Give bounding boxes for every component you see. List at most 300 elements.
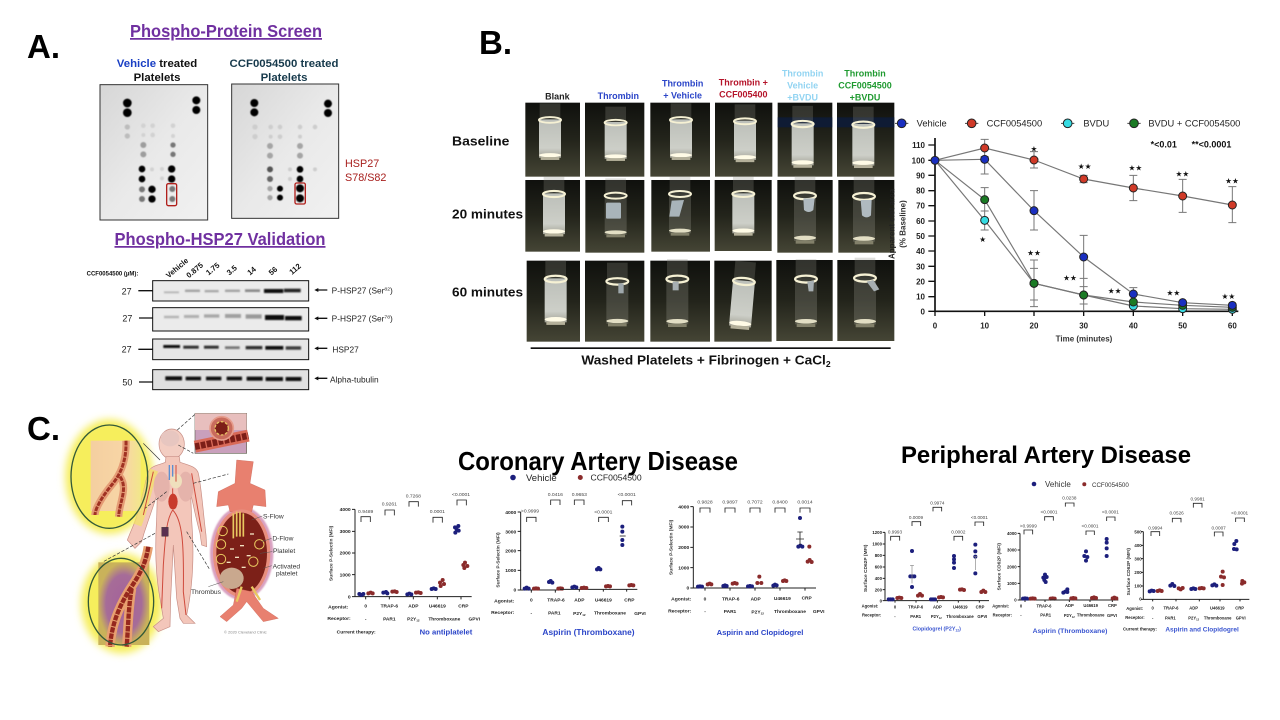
- chart: CAD no antiplatelet: PAR1: [383, 617, 396, 623]
- chart: PAD aspirin and clopidogrel: 0: [1152, 606, 1155, 611]
- significance key: *<0.01: [1151, 140, 1177, 150]
- chart: CAD aspirin and clopidogrel: CRP: [802, 595, 813, 601]
- legend: peripheral: CCF0054500: [1092, 482, 1129, 489]
- label: CCF0054500 treated platelets: CCF0054500 treated: [230, 58, 338, 70]
- legend: coronary: Vehicle: [526, 473, 557, 484]
- chart: PAD clopidogrel: Clopidogrel (P2Y: [912, 627, 955, 633]
- column headers: Vehicle: [787, 80, 818, 90]
- chart: CAD aspirin and clopidogrel: 1000: [678, 565, 690, 571]
- chart: PAD clopidogrel: CRP: [976, 604, 985, 609]
- chart: CAD aspirin: 3000: [505, 529, 517, 535]
- chart: CAD aspirin: Receptor:: [491, 610, 515, 616]
- chart: CAD aspirin: U46619: [595, 598, 612, 604]
- chart: PAD clopidogrel: 0.0002: [951, 529, 966, 534]
- aneurysm labels: Thrombus: [191, 589, 222, 596]
- blot row: alpha-tubulin: [153, 370, 309, 390]
- illustration credit: © 2020 Cleveland Clinic: [224, 630, 267, 635]
- molecular weight markers: [122, 286, 132, 388]
- aneurysm labels: D-Flow: [272, 535, 294, 542]
- chart: CAD no antiplatelet: Thromboxane: [428, 616, 461, 622]
- heading: Phospho-Protein Screen: Phospho-Protein Screen: [130, 21, 322, 41]
- column headers: + Vehicle: [663, 91, 702, 101]
- dose label: CCF0054500 (µM):: [87, 271, 138, 277]
- column headers: CCF005400: [719, 90, 768, 100]
- axes and tick labels: 40: [1129, 322, 1138, 331]
- axes and tick labels: 100: [912, 156, 926, 165]
- legend: peripheral: [1032, 480, 1129, 489]
- lane labels: 1.75: [204, 260, 222, 277]
- chart: PAD clopidogrel: 0: [880, 598, 883, 603]
- chart: CAD aspirin: >0.9999: [521, 509, 539, 515]
- blot row: HSP27: [153, 339, 309, 360]
- chart: CAD aspirin: 12: [582, 613, 586, 617]
- chart: PAD clopidogrel: 1200: [872, 530, 883, 535]
- chart: PAD aspirin and clopidogrel: Aspirin and Clopidogrel: [1165, 627, 1239, 634]
- bracket line and caption: 2: [826, 360, 831, 369]
- axes and tick labels: [888, 138, 1238, 344]
- chart: PAD clopidogrel: 0.0009: [909, 515, 924, 520]
- chart: PAD aspirin and clopidogrel: 0.0526: [1170, 511, 1184, 516]
- legend: peripheral: Vehicle: [1045, 480, 1071, 489]
- chart: CAD aspirin and clopidogrel: 0.9828: [697, 499, 713, 505]
- chart: PAD aspirin: <0.0001: [1082, 523, 1099, 528]
- column headers: +BVDU: [787, 92, 818, 102]
- chart: CAD aspirin and clopidogrel: Surface P-Selectin (MFI): [668, 519, 674, 575]
- chart: PAD aspirin: 1000: [1007, 581, 1017, 586]
- chart: CAD no antiplatelet: 0: [364, 604, 367, 610]
- column headers: Thrombin +: [719, 78, 768, 88]
- body silhouette: [127, 429, 207, 632]
- chart B: apparent clot area over time: [888, 119, 1240, 344]
- axes and tick labels: 60: [916, 217, 926, 226]
- chart: CAD aspirin and clopidogrel: 0.7072: [747, 499, 763, 505]
- chart: CAD aspirin and clopidogrel: GPVI: [813, 609, 825, 615]
- column headers: Thrombin: [662, 79, 703, 89]
- series: BVDU: [935, 160, 1236, 313]
- significance stars: ★★: [1063, 273, 1077, 282]
- chart: PAD clopidogrel: ADP: [933, 604, 942, 609]
- photo row: 20 minutes: [525, 176, 894, 253]
- chart: CAD aspirin and clopidogrel: 4000: [678, 504, 690, 510]
- chart: PAD clopidogrel: -: [894, 614, 896, 619]
- chart: CAD no antiplatelet: No antiplatelet: [420, 628, 473, 637]
- chart: PAD clopidogrel: GPVI: [977, 614, 987, 619]
- chart: PAD clopidogrel: 600: [875, 565, 883, 570]
- chart: PAD clopidogrel: Thromboxane: [946, 614, 974, 619]
- chart: CAD no antiplatelet: [327, 492, 481, 637]
- chart: PAD aspirin: 0: [1020, 603, 1023, 608]
- panel C: vascular anatomy illustration: [65, 413, 300, 653]
- chart: CAD aspirin and clopidogrel: 12: [761, 611, 764, 615]
- chart: CAD aspirin: TRAP-6: [547, 598, 565, 604]
- chart: CAD aspirin: 0.9653: [572, 492, 587, 498]
- axes and tick labels: 30: [916, 262, 926, 271]
- chart: PAD aspirin and clopidogrel: CRP: [1235, 606, 1244, 611]
- chart: PAD aspirin and clopidogrel: -: [1152, 615, 1154, 620]
- chart: CAD aspirin: <0.0001: [594, 509, 613, 515]
- inset: aortic aneurysm: [210, 460, 278, 622]
- chart: PAD clopidogrel: Surface CD62P (MFI): [863, 544, 869, 592]
- chart: CAD no antiplatelet: 0.9489: [358, 509, 374, 515]
- chart: PAD aspirin and clopidogrel: Receptor:: [1125, 615, 1145, 620]
- band labels: P-HSP27 (Ser: [332, 285, 384, 295]
- lane labels: 0.875: [184, 260, 206, 280]
- band labels: 78: [384, 315, 390, 321]
- lane labels: 14: [245, 264, 258, 277]
- band labels: ): [390, 285, 393, 295]
- chart: PAD aspirin: [992, 495, 1119, 635]
- series: BVDU + CCF0054500: [935, 160, 1236, 311]
- chart: CAD no antiplatelet: GPVI: [469, 617, 481, 623]
- chart: CAD aspirin: 0: [530, 598, 533, 604]
- significance stars: ★: [979, 235, 986, 244]
- lane labels: 112: [287, 262, 303, 277]
- series: Vehicle: [935, 155, 1236, 309]
- chart: CAD no antiplatelet: 0.9261: [382, 502, 397, 508]
- error bars: [981, 139, 1236, 311]
- chart: PAD aspirin: GPVI: [1107, 613, 1117, 618]
- chart: CAD aspirin and clopidogrel: ADP: [751, 597, 762, 603]
- chart: PAD aspirin: -: [1020, 613, 1022, 618]
- chart: PAD clopidogrel: [862, 500, 989, 633]
- column headers: Thrombin: [844, 68, 886, 78]
- axes and tick labels: 10: [916, 293, 926, 302]
- chart: CAD aspirin and clopidogrel: 0.9897: [722, 499, 738, 505]
- chart: CAD no antiplatelet: U46619: [429, 604, 446, 610]
- chart: CAD aspirin: GPVI: [634, 611, 646, 617]
- legend: Vehicle: [917, 119, 947, 129]
- bracket line and caption: Washed Platelets + Fibrinogen + CaCl: [581, 353, 808, 367]
- axes and tick labels: 0: [933, 322, 938, 331]
- chart: CAD aspirin and clopidogrel: -: [704, 610, 706, 615]
- chart: PAD aspirin and clopidogrel: 0.0007: [1212, 525, 1226, 530]
- chart: PAD aspirin: PAR1: [1040, 613, 1052, 618]
- aneurysm labels: S-Flow: [263, 514, 284, 521]
- photo row: 60 minutes: [527, 258, 894, 342]
- legend: [895, 119, 1240, 129]
- label lines: [208, 516, 272, 587]
- chart: CAD aspirin and clopidogrel: U46619: [774, 596, 791, 602]
- chart: CAD no antiplatelet: Agonist:: [328, 604, 349, 610]
- chart: PAD aspirin: Surface CD62P (MFI): [997, 543, 1003, 590]
- legend: BVDU + CCF0054500: [1148, 119, 1240, 129]
- axes and tick labels: 10: [980, 322, 990, 331]
- label: vehicle treated platelets: Vehicle treated: [117, 58, 197, 70]
- chart: PAD clopidogrel: 0.9993: [888, 529, 903, 534]
- chart: CAD aspirin and clopidogrel: 0: [704, 597, 707, 603]
- ring: lower limb: [88, 558, 154, 645]
- chart: CAD aspirin and clopidogrel: 0.0014: [797, 499, 813, 505]
- chart: CAD no antiplatelet: <0.0001: [452, 492, 470, 498]
- row label: 20 minutes: 20 minutes: [452, 208, 523, 222]
- heading: Coronary Artery Disease: Coronary Artery Disease: [458, 446, 738, 476]
- heading: Phospho-HSP27 Validation: Phospho-HSP27 Validation: [114, 229, 326, 249]
- axes and tick labels: 60: [1228, 322, 1237, 331]
- significance stars: ★★: [1078, 162, 1092, 171]
- row label: Baseline: Baseline: [452, 135, 509, 149]
- callout lines: [103, 414, 228, 570]
- chart: PAD aspirin: 4000: [1007, 531, 1017, 536]
- chart: PAD aspirin and clopidogrel: 0.9994: [1148, 525, 1163, 530]
- chart: PAD clopidogrel: 12: [955, 629, 959, 633]
- chart: PAD clopidogrel: 12: [939, 616, 942, 620]
- significance stars: [979, 145, 1239, 301]
- chart: CAD aspirin and clopidogrel: PAR1: [724, 609, 737, 615]
- label: HSP27 S78/S82: S78/S82: [345, 172, 386, 184]
- chart: PAD aspirin and clopidogrel: 400: [1134, 543, 1142, 548]
- axes and tick labels: 80: [916, 187, 926, 196]
- chart: PAD aspirin and clopidogrel: 0.9981: [1191, 496, 1205, 501]
- phospho array membrane: vehicle: [100, 85, 208, 220]
- band labels: 82: [384, 286, 390, 292]
- chart: PAD aspirin and clopidogrel: U46619: [1210, 606, 1225, 611]
- lane labels: 56: [267, 265, 279, 277]
- label: vehicle treated platelets: Platelets: [134, 72, 180, 84]
- inset: upper limb artery: [91, 441, 141, 517]
- chart: PAD aspirin and clopidogrel: 0: [1139, 597, 1142, 602]
- chart: PAD aspirin and clopidogrel: 500: [1134, 529, 1142, 534]
- chart: PAD clopidogrel: 400: [875, 576, 883, 581]
- axes and tick labels: 70: [916, 202, 926, 211]
- chart: CAD no antiplatelet: 0: [348, 594, 351, 600]
- chart: CAD aspirin and clopidogrel: 3000: [678, 525, 690, 531]
- chart: CAD aspirin: 4000: [505, 510, 517, 516]
- chart: PAD aspirin: 3000: [1007, 548, 1017, 553]
- axes and tick labels: 20: [916, 277, 926, 286]
- chart: CAD aspirin: Thromboxane: [594, 611, 626, 617]
- chart: CAD aspirin and clopidogrel: Receptor:: [668, 609, 692, 615]
- chart: PAD aspirin: 0.0238: [1062, 495, 1077, 500]
- chart: CAD aspirin and clopidogrel: 2000: [678, 545, 690, 551]
- chart: CAD no antiplatelet: P2Y: [407, 618, 416, 623]
- significance stars: ★: [1031, 145, 1038, 154]
- axes and tick labels: Time (minutes): [1056, 335, 1113, 344]
- band arrows: [314, 288, 327, 380]
- chart: PAD aspirin and clopidogrel: 200: [1134, 570, 1142, 575]
- axes and tick labels: 50: [1178, 322, 1188, 331]
- aneurysm labels: Platelet: [273, 548, 295, 555]
- panel A: phospho-protein screen and validation: [27, 21, 393, 390]
- chart: PAD aspirin: >0.9999: [1020, 523, 1037, 528]
- chart: PAD clopidogrel: P2Y: [931, 614, 939, 619]
- chart: PAD aspirin: Thromboxane: [1077, 613, 1105, 618]
- significance key 2: **<0.0001: [1192, 140, 1231, 150]
- chart: PAD clopidogrel: ): [959, 627, 961, 633]
- chart: CAD aspirin and clopidogrel: 0.8400: [772, 499, 788, 505]
- aneurysm labels: Activated: [273, 563, 300, 570]
- molecular weight markers: 27: [122, 314, 132, 324]
- chart: PAD aspirin and clopidogrel: Current therapy:: [1123, 627, 1157, 632]
- chart: PAD aspirin: ADP: [1065, 603, 1074, 608]
- chart: PAD clopidogrel: 0: [894, 604, 897, 609]
- ring: upper limb: [71, 425, 148, 528]
- chart: CAD aspirin and clopidogrel: Agonist:: [671, 597, 692, 603]
- chart: CAD no antiplatelet: -: [365, 617, 367, 622]
- chart: CAD aspirin and clopidogrel: TRAP-6: [722, 597, 740, 603]
- panel letter B: B.: [479, 24, 512, 61]
- axes and tick labels: 0: [921, 307, 926, 316]
- chart: PAD aspirin and clopidogrel: ADP: [1189, 606, 1198, 611]
- chart: CAD aspirin: 2000: [505, 549, 517, 555]
- lane labels: [164, 256, 303, 280]
- chart: PAD aspirin: 2000: [1007, 564, 1017, 569]
- chart: PAD aspirin and clopidogrel: <0.0001: [1231, 511, 1249, 516]
- chart: PAD clopidogrel: Receptor:: [862, 613, 881, 618]
- chart: CAD no antiplatelet: 0.0001: [430, 509, 445, 515]
- column headers: Blank: [545, 92, 570, 102]
- chart: PAD clopidogrel: PAR1: [910, 614, 922, 619]
- chart: PAD aspirin and clopidogrel: Surface CD62P (MFI): [1126, 548, 1132, 595]
- row label: 60 minutes: 60 minutes: [452, 286, 523, 300]
- molecular weight markers: 27: [122, 286, 132, 296]
- chart: PAD aspirin and clopidogrel: [1123, 496, 1249, 634]
- chart: PAD aspirin and clopidogrel: 100: [1134, 584, 1142, 589]
- chart: CAD aspirin and clopidogrel: 0: [687, 586, 690, 592]
- chart: PAD clopidogrel: 1000: [872, 542, 883, 547]
- chart: CAD no antiplatelet: TRAP-6: [381, 604, 398, 610]
- chart: PAD aspirin: CRP: [1108, 603, 1117, 608]
- chart: PAD aspirin and clopidogrel: 300: [1134, 556, 1142, 561]
- band labels: P-HSP27 (Ser: [332, 314, 384, 324]
- axes and tick labels: 30: [1079, 322, 1089, 331]
- chart: CAD no antiplatelet: Surface P-Selectin (MFI): [329, 525, 335, 581]
- axes and tick labels: (% Baseline): [898, 200, 907, 248]
- column headers: +BVDU: [850, 92, 880, 102]
- yellow glow lower limb: [81, 553, 162, 653]
- chart: PAD aspirin and clopidogrel: Thromboxane: [1204, 615, 1232, 620]
- chart: PAD clopidogrel: U46619: [953, 604, 968, 609]
- column headers: [545, 68, 892, 102]
- axes and tick labels: Apparent clot area: [888, 188, 897, 259]
- inset: cerebral aneurysm: [195, 413, 248, 453]
- chart: CAD aspirin: 0: [514, 588, 517, 594]
- series: CCF0054500: [931, 144, 1236, 209]
- chart: PAD aspirin and clopidogrel: PAR1: [1165, 615, 1176, 620]
- molecular weight markers: 27: [122, 345, 132, 355]
- significance stars: ★★: [1128, 163, 1142, 172]
- legend: coronary: [510, 472, 642, 484]
- chart: CAD aspirin: Agonist:: [494, 599, 515, 605]
- chart: CAD no antiplatelet: Receptor:: [327, 616, 351, 622]
- chart: PAD aspirin: Agonist:: [992, 604, 1009, 609]
- chart: CAD aspirin: 1000: [505, 568, 517, 574]
- chart: CAD aspirin: Surface P-Selectin (MFI): [495, 532, 501, 588]
- chart: CAD aspirin: <0.0001: [618, 492, 636, 498]
- lane labels: Vehicle: [164, 256, 190, 280]
- chart: PAD aspirin: 12: [1072, 615, 1075, 619]
- significance stars: ★★: [1108, 287, 1122, 296]
- legend: coronary: CCF0054500: [590, 472, 642, 482]
- aneurysm labels: [191, 514, 300, 596]
- chart: CAD no antiplatelet: ADP: [408, 604, 419, 610]
- chart: CAD aspirin: [491, 492, 646, 637]
- inset: lower limb artery: [98, 547, 149, 647]
- significance stars: ★★: [1166, 288, 1180, 297]
- significance stars: ★★: [1225, 177, 1239, 186]
- phospho array membrane: CCF0054500: [232, 84, 339, 218]
- blot row: P-HSP27 Ser78: [153, 308, 309, 331]
- chart: PAD clopidogrel: TRAP-6: [908, 604, 924, 609]
- chart: PAD aspirin and clopidogrel: GPVI: [1236, 615, 1246, 620]
- chart: PAD aspirin: Aspirin (Thromboxane): [1033, 628, 1107, 635]
- molecular weight markers: 50: [122, 378, 132, 388]
- chart: CAD no antiplatelet: CRP: [458, 604, 469, 610]
- heading: Peripheral Artery Disease: Peripheral Artery Disease: [901, 442, 1191, 469]
- band labels: ): [390, 314, 393, 324]
- chart: CAD aspirin: CRP: [624, 598, 635, 604]
- chart: PAD aspirin and clopidogrel: Agonist:: [1126, 606, 1143, 611]
- chart: PAD aspirin: U46619: [1083, 603, 1099, 608]
- yellow glow upper limb: [65, 419, 153, 534]
- chart: PAD aspirin: 0: [1014, 598, 1017, 603]
- chart: PAD aspirin: <0.0001: [1102, 509, 1119, 514]
- chart: CAD no antiplatelet: 12: [416, 619, 420, 623]
- panel B: clot retraction photos: [452, 68, 894, 369]
- chart: PAD clopidogrel: Agonist:: [862, 604, 878, 609]
- significance stars: ★★: [1175, 169, 1189, 178]
- chart: CAD aspirin: PAR1: [548, 611, 561, 617]
- chart: CAD no antiplatelet: 1000: [340, 572, 351, 578]
- chart: CAD aspirin and clopidogrel: Thromboxane: [774, 609, 806, 615]
- chart: CAD aspirin and clopidogrel: P2Y: [751, 610, 761, 615]
- chart: CAD aspirin: Aspirin (Thromboxane): [542, 627, 635, 637]
- chart: CAD aspirin: P2Y: [573, 612, 582, 617]
- legend: CCF0054500: [987, 119, 1042, 129]
- chart: CAD no antiplatelet: 4000: [340, 507, 351, 513]
- significance stars: ★★: [1221, 292, 1235, 301]
- blot row: P-HSP27 Ser82: [153, 281, 309, 301]
- chart: CAD aspirin and clopidogrel: Aspirin and Clopidogrel: [717, 628, 803, 637]
- axes and tick labels: 50: [916, 232, 926, 241]
- axes and tick labels: 90: [916, 171, 926, 180]
- chart: CAD aspirin: -: [531, 611, 533, 616]
- chart: PAD clopidogrel: 0.9974: [930, 500, 945, 505]
- chart: PAD aspirin and clopidogrel: P2Y: [1188, 616, 1196, 621]
- chart: PAD aspirin: Receptor:: [993, 613, 1012, 618]
- bracket line and caption: [531, 347, 891, 369]
- chart: CAD aspirin and clopidogrel: [668, 499, 825, 637]
- chart: PAD aspirin: <0.0001: [1041, 509, 1058, 514]
- chart: PAD clopidogrel: 200: [875, 587, 883, 592]
- chart: CAD aspirin: ADP: [574, 598, 585, 604]
- chart: CAD no antiplatelet: 2000: [340, 551, 351, 557]
- column headers: CCF0054500: [838, 80, 892, 90]
- band labels: Alpha-tubulin: [330, 375, 379, 385]
- aneurysm labels: platelet: [276, 571, 298, 578]
- panel letter A: A.: [27, 28, 60, 65]
- chart: CAD aspirin: 0.0416: [548, 492, 563, 498]
- band labels: [330, 285, 393, 385]
- column headers: Thrombin: [782, 68, 823, 78]
- chart: PAD aspirin and clopidogrel: 12: [1196, 618, 1200, 622]
- chart: CAD no antiplatelet: Current therapy:: [337, 630, 376, 636]
- axes and tick labels: 110: [912, 141, 926, 150]
- label: HSP27 S78/S82: HSP27: [345, 158, 379, 170]
- chart: PAD aspirin: TRAP-6: [1036, 603, 1052, 608]
- panel letter C: C.: [27, 410, 60, 447]
- weight marker ticks: [138, 291, 153, 382]
- label: CCF0054500 treated platelets: Platelets: [261, 72, 307, 84]
- chart: PAD aspirin and clopidogrel: TRAP-6: [1163, 606, 1179, 611]
- photo row: baseline: [525, 103, 894, 177]
- chart: PAD clopidogrel: 800: [875, 553, 883, 558]
- legend: BVDU: [1083, 119, 1110, 129]
- lane labels: 3.5: [225, 263, 239, 277]
- column headers: Thrombin: [598, 91, 639, 101]
- significance stars: ★★: [1027, 249, 1041, 258]
- axes and tick labels: 20: [1030, 322, 1039, 331]
- band labels: HSP27: [332, 345, 359, 355]
